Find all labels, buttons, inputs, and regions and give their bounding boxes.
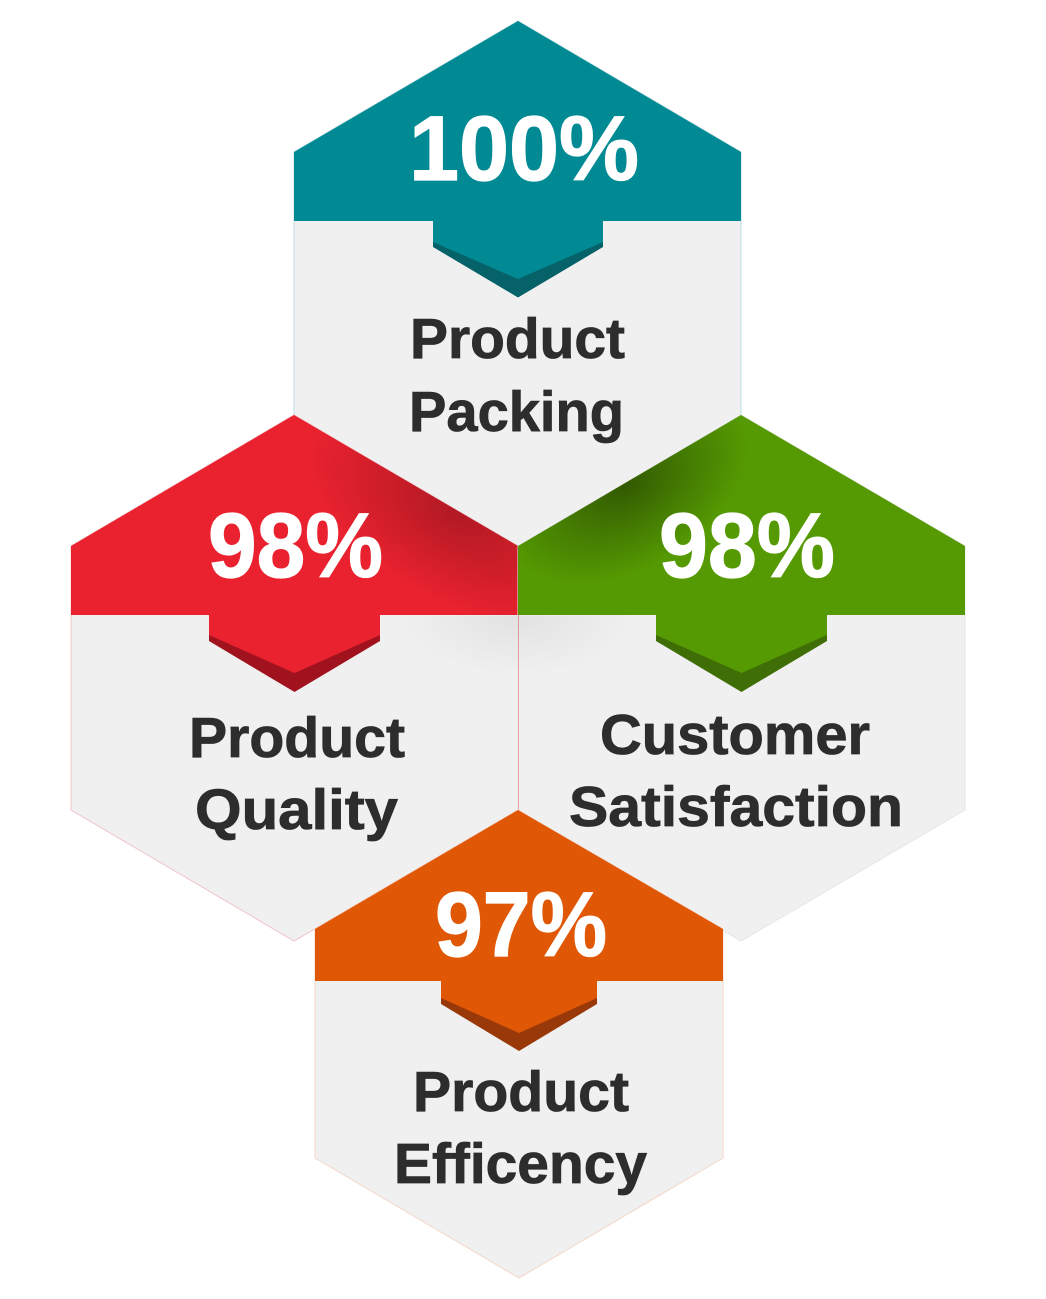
- panel: product quality: [70, 414, 518, 942]
- hexagon body: [71, 415, 518, 941]
- percentage 98%: 98%: [659, 495, 835, 597]
- orange tab: [441, 980, 597, 1033]
- soft shadow below bands: [468, 616, 568, 640]
- divider line: [518, 615, 520, 810]
- hexagon body: [315, 810, 723, 1278]
- label customer satisfaction: Customer: [600, 703, 870, 767]
- tab shadow: [209, 634, 380, 692]
- label product quality: Quality: [195, 778, 398, 842]
- band shadow: [524, 425, 732, 571]
- red tab: [209, 614, 380, 673]
- band shadow: [328, 440, 518, 608]
- panel: customer satisfaction: [398, 344, 965, 941]
- label product packing: Packing: [409, 380, 624, 444]
- label customer satisfaction: Satisfaction: [569, 775, 903, 839]
- hexagon body: [518, 415, 965, 941]
- green tab: [656, 614, 827, 673]
- teal tab: [433, 220, 603, 279]
- orange header band: [315, 810, 723, 981]
- label product efficency: Efficency: [394, 1132, 647, 1196]
- panel: product efficiency: [315, 810, 723, 1278]
- green header band: [518, 415, 965, 615]
- label product quality: Product: [189, 706, 405, 770]
- red header band: [71, 415, 518, 615]
- hexagon body: [294, 21, 741, 547]
- tab shadow: [656, 634, 827, 692]
- percentage 98%: 98%: [208, 495, 383, 597]
- tab shadow: [441, 997, 597, 1051]
- teal header band: [294, 21, 741, 221]
- panel: product packing: [294, 21, 741, 547]
- percentage 100%: 100%: [409, 98, 639, 200]
- percentage 97%: 97%: [435, 874, 607, 976]
- tab shadow: [433, 240, 603, 298]
- label product packing: Product: [410, 307, 625, 371]
- label product efficency: Product: [413, 1060, 629, 1124]
